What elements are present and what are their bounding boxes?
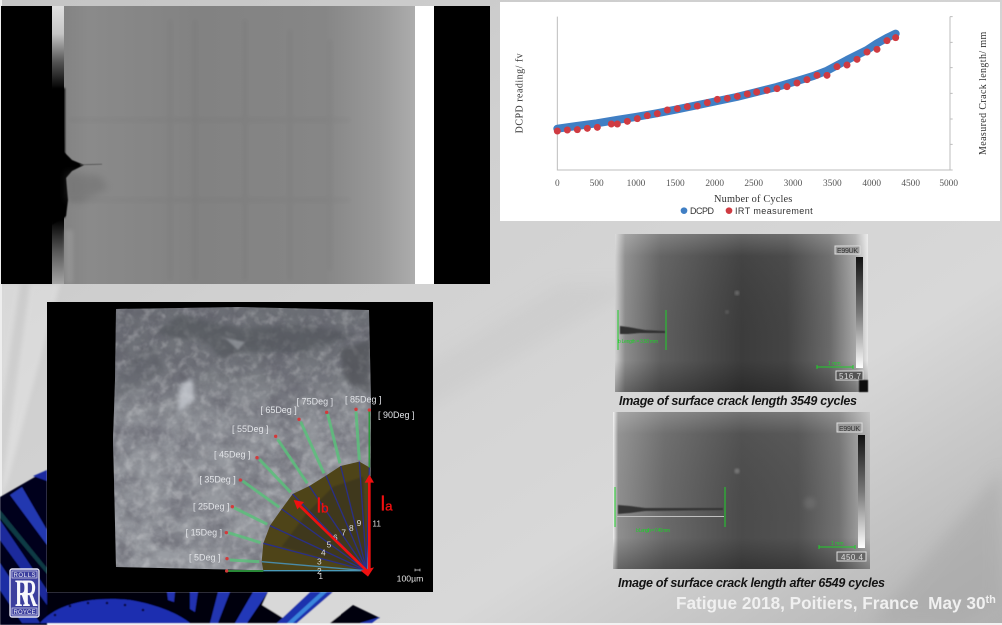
temperature scale	[858, 435, 865, 548]
thermal image at 6549 cycles	[613, 412, 870, 569]
x axis tick labels: 3500	[823, 179, 842, 189]
thermal image at 3549 cycles: 1 mm	[828, 361, 840, 367]
radial line numbers	[317, 518, 381, 581]
angle labels: [ 25Deg ]	[193, 501, 229, 511]
radial line numbers: 2	[317, 566, 322, 576]
angle labels: [ 90Deg ]	[378, 410, 414, 420]
conference footer: th	[986, 594, 996, 606]
thermal image at 3549 cycles: E99UK	[837, 248, 858, 255]
label: la: la	[381, 493, 393, 515]
red measurement points	[225, 408, 371, 573]
x axis tick labels	[555, 179, 958, 189]
x axis tick labels: 3000	[784, 179, 803, 189]
x axis tick labels: 0	[555, 179, 560, 189]
angle labels: [ 5Deg ]	[189, 552, 220, 562]
x axis tick labels: 4000	[862, 179, 881, 189]
left axis title: DCPD reading/ fv	[515, 53, 526, 133]
thermal image at 3549 cycles: 516.7	[839, 372, 862, 381]
chart legend	[681, 206, 813, 216]
label: lb: lb	[317, 496, 329, 518]
radial line numbers: 8	[349, 523, 354, 533]
angle labels: [ 35Deg ]	[199, 475, 236, 485]
fracture surface texture	[110, 305, 375, 573]
radial line numbers: 7	[341, 528, 346, 538]
crack	[620, 326, 665, 334]
green extension lines	[228, 412, 359, 562]
caption for 6549 cycles: Image of surface crack length after 6549 cycles	[618, 576, 885, 590]
crack	[618, 505, 723, 514]
DCPD series	[557, 34, 896, 129]
x axis tick labels: 2500	[744, 179, 763, 189]
x axis tick labels: 2000	[705, 179, 724, 189]
crack notch	[64, 142, 84, 218]
radial line numbers: 11	[372, 519, 381, 529]
green scale marker	[817, 365, 853, 369]
fracture surface micrograph with crack front measurements	[47, 302, 433, 592]
green crack length marker	[615, 487, 725, 527]
radial line numbers: 9	[357, 518, 362, 528]
Rolls-Royce logo: ROLLS	[14, 573, 36, 579]
green crack length marker	[618, 310, 666, 350]
scale bar: 100µm	[397, 573, 423, 583]
thermal image at 3549 cycles	[615, 234, 868, 392]
thermal image at 6549 cycles: E99UK	[839, 426, 860, 433]
thermal image: specimen with initial crack	[1, 6, 490, 284]
radial line numbers: 6	[333, 532, 338, 542]
angle labels: [ 55Deg ]	[232, 424, 268, 434]
IRT measurement series	[554, 34, 899, 134]
angle labels: [ 45Deg ]	[214, 449, 250, 459]
thermal image at 6549 cycles: b Length = 7.40 mm	[636, 528, 670, 534]
conference footer: Fatigue 2018, Poitiers, France May 30	[676, 593, 986, 613]
thermal image at 6549 cycles: 1 mm	[831, 541, 844, 547]
x axis tick labels: 5000	[939, 179, 958, 189]
x axis tick labels: 4500	[901, 179, 920, 189]
Rolls-Royce logo	[10, 569, 39, 617]
radial line numbers: 4	[321, 548, 326, 558]
x axis tick labels: 1500	[666, 179, 685, 189]
right axis title: Measured Crack length/ mm	[978, 31, 989, 155]
chart panel: DCPD and IRT crack growth	[500, 2, 1000, 221]
blue turbine blades artwork	[0, 470, 380, 625]
pale gap between blades	[262, 592, 340, 623]
angle labels: [ 15Deg ]	[186, 527, 222, 537]
chart legend: DCPD	[690, 206, 714, 216]
radial line numbers: 5	[327, 539, 332, 549]
chart axes	[557, 17, 953, 170]
angle labels: [ 85Deg ]	[345, 395, 381, 405]
x axis tick labels: 1000	[627, 179, 646, 189]
angle labels: [ 75Deg ]	[297, 396, 333, 406]
crack front sector	[262, 462, 369, 571]
chart legend: IRT measurement	[735, 206, 813, 216]
thermal image at 3549 cycles: b Length = 3.50 mm	[618, 339, 658, 345]
scale bar	[397, 569, 423, 583]
Rolls-Royce logo: ROYCE	[14, 610, 36, 616]
x axis title: Number of Cycles	[714, 194, 792, 205]
x axis tick labels: 500	[590, 179, 604, 189]
Rolls-Royce logo: RR	[15, 571, 38, 615]
radial line numbers: 1	[318, 571, 323, 581]
thermal image at 6549 cycles: 450.4	[841, 553, 864, 562]
green scale marker	[819, 545, 855, 549]
radial line numbers: 3	[317, 556, 322, 566]
temperature scale	[856, 257, 863, 368]
caption for 3549 cycles: Image of surface crack length 3549 cycles	[619, 394, 857, 408]
angle labels	[186, 395, 414, 562]
radial measurement lines	[262, 462, 369, 571]
red arrows	[294, 475, 374, 577]
angle labels: [ 65Deg ]	[260, 405, 297, 415]
